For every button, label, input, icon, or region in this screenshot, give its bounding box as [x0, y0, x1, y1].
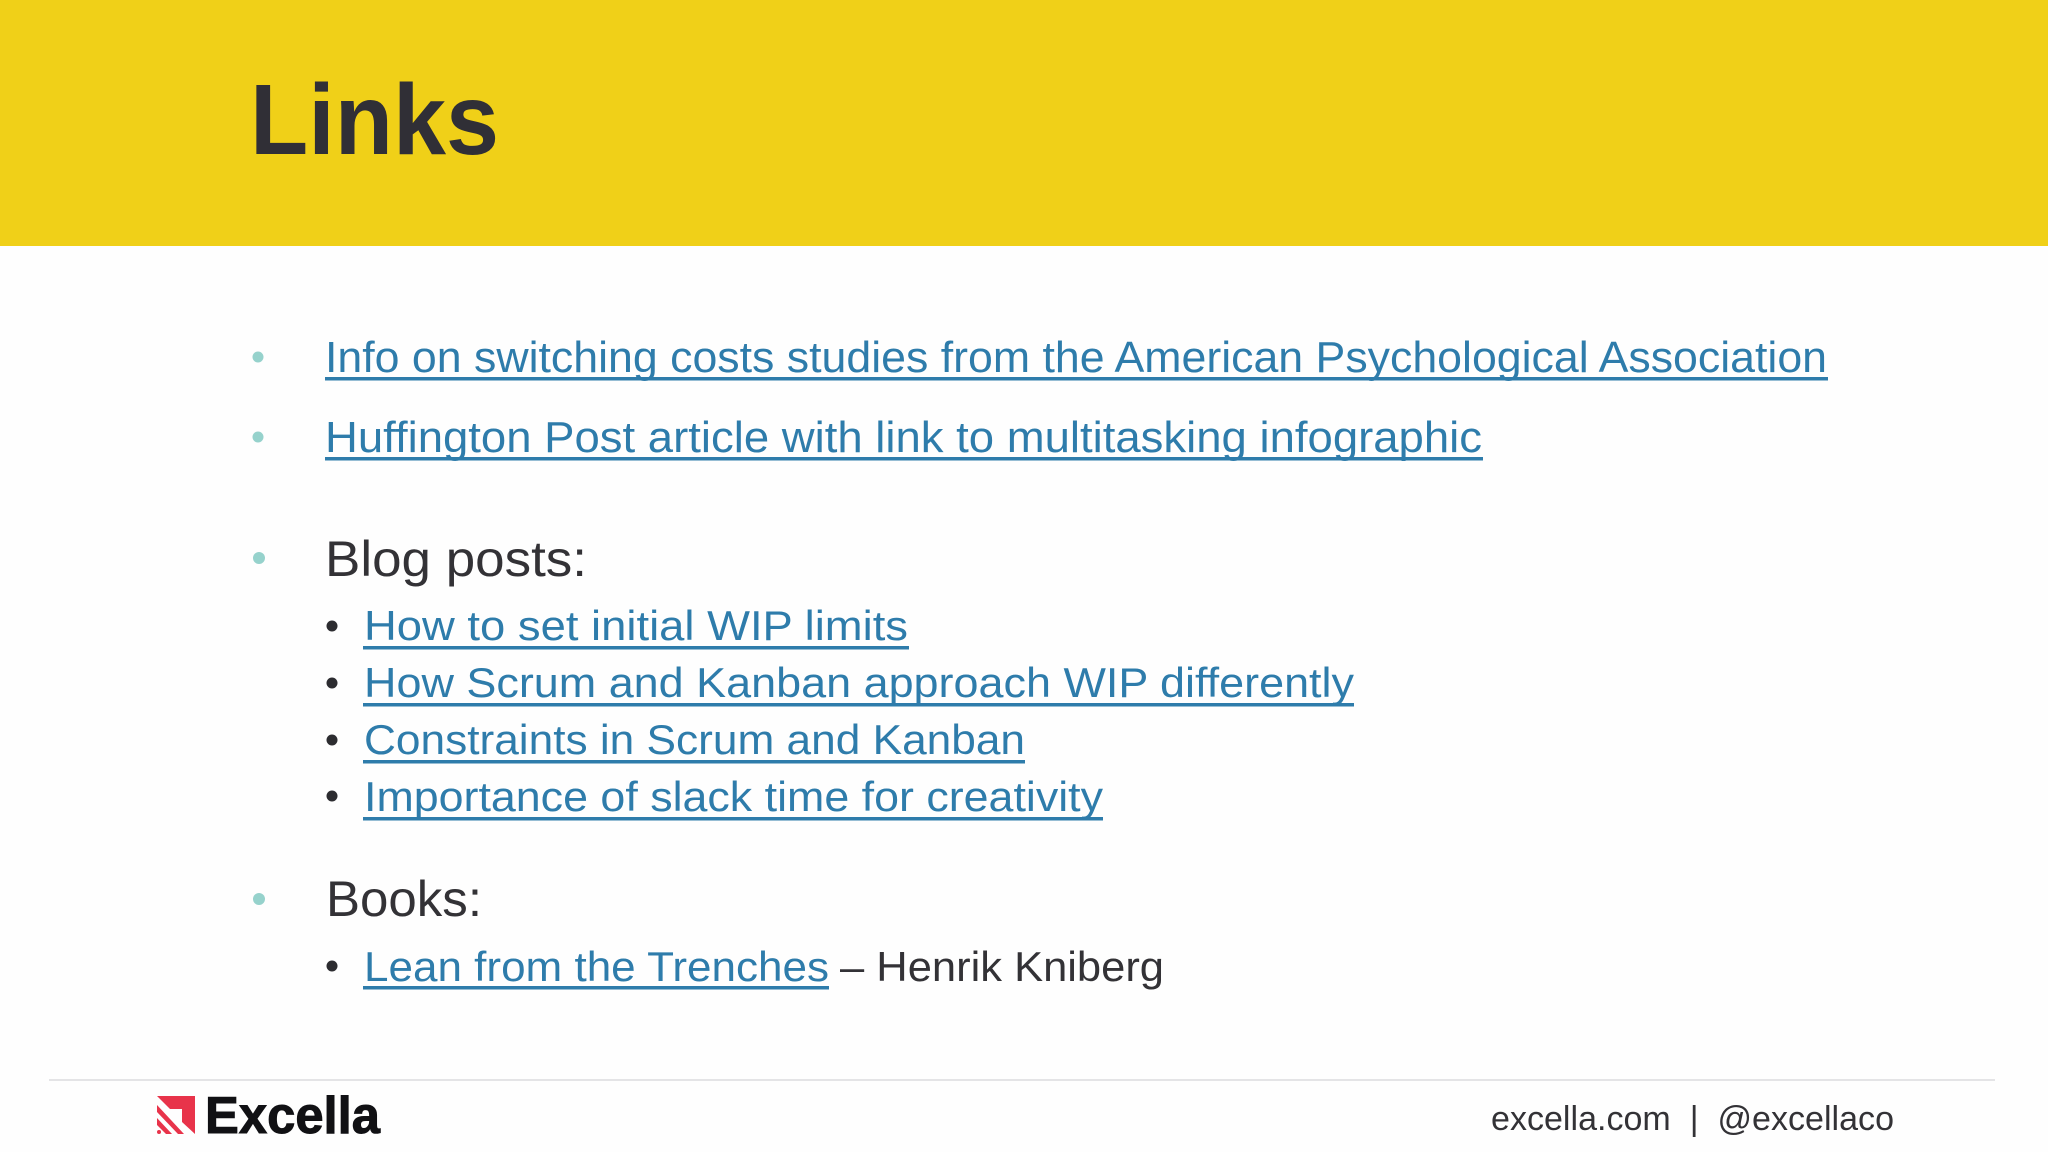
bullet link: switching costs studies: Info on switching costs studies from the American Psychological Association	[325, 333, 1827, 382]
icon: Excella mark	[157, 1096, 195, 1134]
footer contact: excella.com | @excellaco	[1491, 1100, 1894, 1138]
logo wordmark: Excella	[205, 1087, 381, 1145]
books heading: Books:	[326, 871, 482, 927]
blog link: constraints: Constraints in Scrum and Kanban	[364, 716, 1025, 763]
book entry: Lean from the Trenches	[326, 943, 1164, 990]
header banner	[0, 0, 2048, 246]
book entry: Lean from the Trenches: – Henrik Kniberg	[840, 943, 1164, 990]
section: blog posts	[253, 531, 1354, 820]
title: Links	[250, 64, 499, 176]
blog posts heading: Blog posts:	[325, 531, 587, 587]
blog link: slack time: Importance of slack time for creativity	[364, 773, 1103, 820]
section: books	[253, 871, 1164, 990]
bullet link: Huffington Post article: Huffington Post article with link to multitasking infographic	[325, 413, 1482, 462]
book entry: Lean from the Trenches: Lean from the Trenches	[364, 943, 829, 990]
blog link: Scrum and Kanban WIP: How Scrum and Kanban approach WIP differently	[364, 659, 1354, 706]
books heading	[253, 871, 482, 927]
blog link: initial WIP limits: How to set initial WIP limits	[364, 602, 908, 649]
Excella logo	[157, 1087, 381, 1145]
